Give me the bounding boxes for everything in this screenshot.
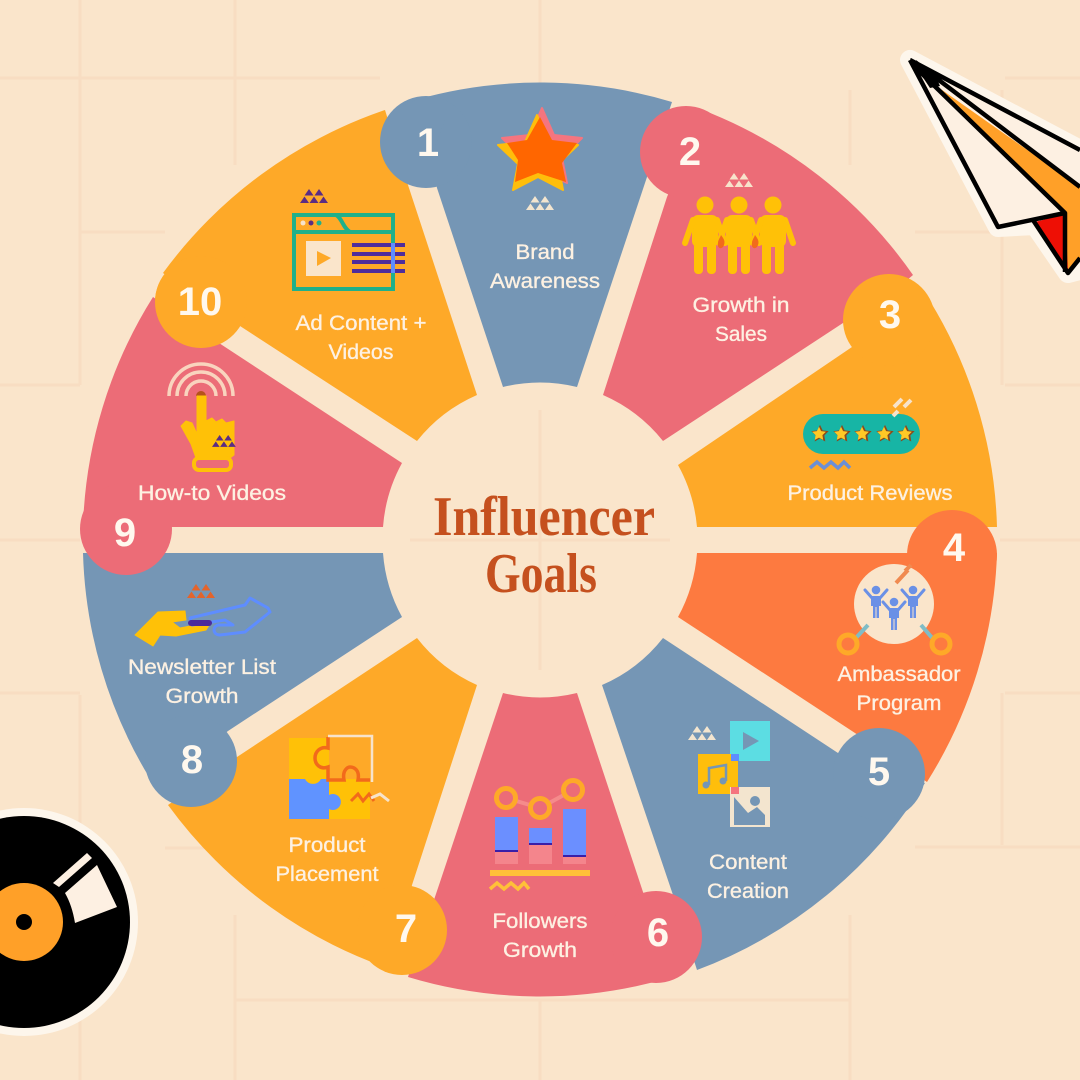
icon: vinyl record (0, 808, 138, 1036)
icon: hands passing envelope (135, 584, 270, 646)
label: Awareness (490, 270, 600, 293)
label (276, 834, 379, 886)
label: Product (288, 834, 366, 857)
label: Program (856, 692, 942, 715)
icon: hand tapping (169, 364, 236, 470)
label: Content (709, 851, 787, 874)
label: Product Reviews (788, 482, 952, 505)
icon: ambassador group (839, 564, 950, 653)
icon: video ad browser (294, 189, 405, 289)
label: Newsletter List (128, 656, 276, 679)
badge: number 1 (380, 96, 472, 188)
label: Placement (276, 863, 379, 886)
label: How-to Videos (138, 482, 286, 505)
panel: 10 Ad Content + Videos (155, 110, 477, 441)
panel: 4 Ambassador Program: 4 (943, 526, 966, 570)
label (692, 294, 790, 346)
icon: three people (685, 173, 793, 274)
panel: 8 Newsletter List Growth (83, 553, 402, 807)
panel: 10 badge and content (155, 189, 426, 364)
panel: 7 Product Placement (168, 638, 477, 975)
label: Brand (516, 241, 574, 264)
icon: media tiles (688, 721, 770, 827)
label: Followers (492, 910, 588, 933)
label: Ad Content + (296, 312, 426, 335)
panel: 2 Growth in Sales (603, 106, 913, 441)
panel: 9 How-to Videos: 9 (114, 511, 136, 555)
label (490, 241, 600, 293)
label: Growth (503, 939, 577, 962)
label (492, 910, 588, 962)
label: Sales (715, 323, 767, 346)
icon: five star rating (803, 399, 920, 468)
title (433, 486, 655, 605)
panel: 3 Product Reviews: 3 (879, 293, 901, 337)
panel: 1 Brand Awareness (415, 83, 672, 387)
panel: 3 Product Reviews (678, 274, 997, 527)
panel: 6 Followers Growth: 6 (647, 911, 669, 955)
title: Influencer (433, 486, 655, 548)
panel: 4 Ambassador Program (678, 510, 997, 782)
panel: 5 Content Creation: 5 (868, 750, 890, 794)
panel: 6 Followers Growth (408, 693, 702, 996)
icon: paper plane (910, 58, 1080, 273)
label: Growth in (692, 294, 790, 317)
label (296, 312, 426, 364)
label: Ambassador (838, 663, 961, 686)
label (838, 663, 961, 715)
panel: 9 How-to Videos (80, 297, 402, 575)
badge: number 1: 1 (417, 121, 439, 165)
label: Growth (166, 685, 238, 708)
label: Creation (707, 880, 789, 903)
icon: puzzle (289, 736, 389, 819)
label (128, 656, 276, 708)
icon: bar chart (490, 780, 590, 889)
panel: 8 Newsletter List Growth: 8 (181, 738, 203, 782)
title: Goals (485, 543, 597, 605)
panel: 7 Product Placement: 7 (395, 907, 417, 951)
panel: 5 Content Creation (602, 638, 925, 970)
panel: 10 badge and content: 10 (178, 280, 222, 324)
panel: 2 Growth in Sales: 2 (679, 130, 701, 174)
label: Videos (328, 341, 394, 364)
label (707, 851, 789, 903)
icon: star (498, 108, 582, 210)
